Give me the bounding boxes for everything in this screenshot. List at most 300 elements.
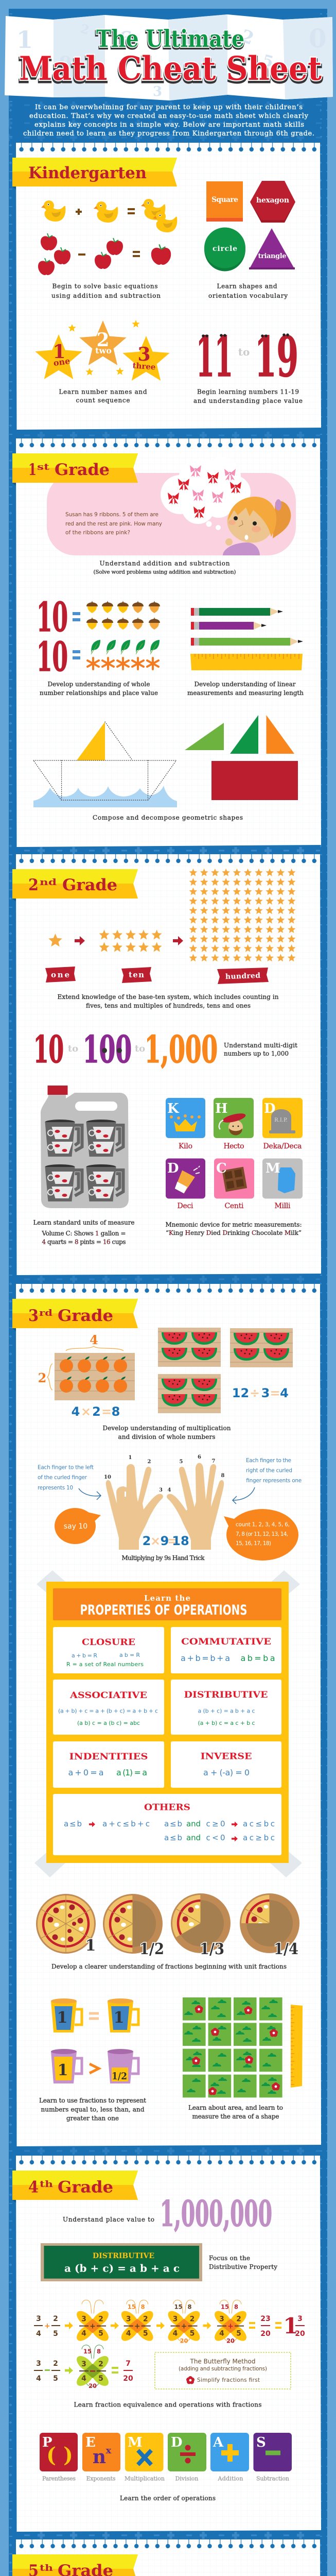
others: a ≤ b <box>64 1819 82 1828</box>
ribbon heading: 1st grade <box>12 453 138 486</box>
right note: finger represents one <box>246 1478 302 1484</box>
finger numbers: 4 <box>168 1487 171 1493</box>
caption: addition and subtraction: Understand addition and subtraction <box>100 560 230 567</box>
ribbon heading: 5th grade <box>12 2554 138 2576</box>
caption: base ten: fives, tens and multiples of hundreds, tens and ones <box>86 1002 251 1009</box>
shape: triangle: triangle <box>258 252 286 260</box>
ribbon heading: kindergarten: Kindergarten <box>28 164 147 182</box>
finger numbers: 1 <box>129 1455 132 1461</box>
distributive: DISTRIBUTIVE <box>184 1690 268 1700</box>
caption: number names: count sequence <box>76 397 130 404</box>
distributive: (a + b) c = a c + b c <box>198 1720 255 1726</box>
butterfly method addition: 5 <box>53 2330 58 2338</box>
tile: parentheses: P <box>42 2435 52 2450</box>
mug fractions <box>51 1998 138 2083</box>
butterfly method note: (adding and subtracting fractions) <box>179 2366 267 2372</box>
inverse <box>171 1741 281 1788</box>
ribbon heading: 3rd grade <box>12 1299 138 1331</box>
caption: geometric shapes: Compose and decompose geometric shapes <box>93 814 243 821</box>
closure: CLOSURE <box>82 1637 135 1648</box>
caption: equations: using addition and subtraction <box>51 292 161 299</box>
ribbon heading: 3rd grade: 3 <box>28 1307 39 1325</box>
background numbers: 6 <box>118 27 133 52</box>
ribbon heading: 1st grade: 1 <box>28 461 37 479</box>
butterfly method subtraction: 2 <box>53 2360 58 2368</box>
butterfly method subtraction: 4 <box>36 2375 41 2383</box>
caption: 11-19 <box>193 388 303 404</box>
identities: INDENTITIES <box>69 1752 148 1762</box>
counting stars: 1 <box>52 341 66 363</box>
shape: triangle <box>249 228 295 269</box>
caption: area: Learn about area, and learn to <box>188 2104 283 2111</box>
commutative: COMMUTATIVE <box>181 1637 271 1647</box>
tile: deka <box>262 1098 303 1150</box>
butterfly step 4: 8 <box>234 2303 238 2311</box>
orange crate multiplication: × <box>81 1404 91 1419</box>
butterfly method note: Simplify fractions first <box>197 2377 260 2383</box>
pizza fractions: 1/3 <box>200 1940 224 1958</box>
butterfly step 3: 2 <box>190 2315 194 2324</box>
tile: deka: Deka/Deca <box>263 1142 302 1150</box>
equation 2 x 9 = 18: × <box>150 1534 161 1548</box>
finger numbers: 5 <box>180 1459 183 1465</box>
bubble: say 10 <box>55 1508 101 1544</box>
mug fractions: 1 <box>57 2009 67 2027</box>
others: a c ≤ b c <box>243 1819 275 1828</box>
ribbon heading: 1st grade: Grade <box>55 461 110 479</box>
chalkboard: distributive <box>41 2243 202 2281</box>
shape: square: Square <box>211 196 238 204</box>
others: OTHERS <box>144 1803 190 1813</box>
place value to a million: Understand place value to <box>63 2216 154 2223</box>
word problem text <box>65 512 162 536</box>
tile: hecto: H <box>215 1101 228 1116</box>
finger numbers: 3 <box>159 1487 163 1493</box>
thought bubble <box>161 457 251 530</box>
shape: hexagon <box>250 181 295 223</box>
counting stars: one <box>53 356 70 368</box>
ribbons <box>168 465 241 518</box>
closure: a + b = R <box>72 1652 97 1659</box>
caption: place value <box>40 681 158 697</box>
card header: Learn the <box>144 1594 190 1603</box>
intro text <box>23 104 314 138</box>
butterfly method addition: 2 <box>53 2315 58 2323</box>
caption: standard units: Volume C: Shows 1 gallon = <box>41 1230 126 1237</box>
tile: addition <box>210 2433 249 2482</box>
butterfly method note: The Butterfly Method <box>189 2358 255 2365</box>
right note: right of the curled <box>246 1468 292 1474</box>
left note: Each finger to the left <box>38 1465 94 1471</box>
butterfly method subtraction: 15 <box>83 2348 92 2355</box>
counting stars: three <box>132 361 156 372</box>
panel: 1st grade <box>12 438 321 847</box>
shape: circle <box>204 228 245 271</box>
butterfly step 1: 4 <box>81 2330 86 2338</box>
result: 20 <box>260 2330 271 2338</box>
arrow right <box>233 1487 255 1504</box>
tile: subtraction: S <box>256 2435 266 2450</box>
butterfly method note <box>155 2352 291 2389</box>
numbers 10 to 100 to 1000 <box>33 1027 218 1071</box>
finger numbers: 7 <box>212 1459 216 1464</box>
orange crate multiplication: 2 <box>92 1404 101 1419</box>
intro text: education. That’s why we created an easy-to-use math sheet which clearly <box>29 112 309 120</box>
bubble: say 10: say 10 <box>64 1522 87 1531</box>
ribbon heading: 5th grade: th <box>40 2563 53 2573</box>
tile: exponents: n <box>93 2446 106 2468</box>
mug fractions: 1 <box>58 2061 68 2079</box>
pizza fractions: 1/2 <box>139 1940 164 1958</box>
butterfly method addition: 4 <box>36 2330 41 2338</box>
tile: kilo <box>166 1098 205 1150</box>
commutative: a b = b a <box>241 1653 275 1663</box>
bubble: count: 15, 16, 17, 18) <box>236 1540 271 1547</box>
intro text: children need to learn as they progress from Kindergarten through 6th grade. <box>23 130 314 138</box>
numbers 10 to 100 to 1000: 1,000 <box>145 1027 218 1071</box>
numbers 11 to 19: 19 <box>255 325 298 389</box>
ten equals acorns <box>37 594 160 641</box>
orange crate multiplication: 2 <box>38 1370 46 1385</box>
butterfly step 4 <box>212 2300 249 2345</box>
pizza fractions: 1 <box>85 1937 96 1955</box>
word problem text: of the ribbons are pink? <box>65 530 130 536</box>
base ten stars <box>48 868 297 963</box>
caption: mnemonic: “King Henry Died Drinking Chocolate Milk” <box>166 1229 302 1236</box>
right note <box>246 1458 302 1484</box>
others: a ≤ b <box>164 1833 182 1842</box>
associative <box>53 1680 164 1735</box>
tile: subtraction <box>253 2433 292 2482</box>
chalkboard: distributive: a (b + c) = a b + a c <box>64 2262 180 2275</box>
caption: equations <box>51 282 161 299</box>
tile: parentheses <box>40 2433 78 2482</box>
inverse: a + (-a) = 0 <box>203 1768 250 1777</box>
result: 3 <box>297 2315 303 2323</box>
label: one <box>45 967 76 982</box>
caption: fractions: Develop a clearer understanding of fractions beginning with unit fractions <box>51 1963 287 1970</box>
background numbers: 2 <box>79 21 91 38</box>
distributive <box>171 1680 281 1735</box>
orange crate multiplication: 4 <box>72 1404 80 1419</box>
caption: area <box>188 2104 283 2120</box>
counting stars: 3 <box>137 344 151 365</box>
butterfly step 3 <box>165 2300 203 2345</box>
tile: multiplication: M <box>128 2435 143 2450</box>
butterfly step 3: 5 <box>190 2330 194 2338</box>
caption: place value: Develop understanding of whole <box>47 681 150 688</box>
label: hundred <box>217 968 269 984</box>
tile: centi: C <box>216 1161 227 1176</box>
caption: number names: Learn number names and <box>59 388 147 396</box>
tile: division: Division <box>175 2475 199 2482</box>
boat made of shapes <box>33 722 177 807</box>
numbers 11 to 19: to <box>238 346 250 358</box>
shape: square <box>206 181 243 222</box>
tile: kilo: K <box>167 1101 180 1116</box>
butterfly step 1: 2 <box>98 2315 103 2324</box>
background numbers: 2 <box>238 26 257 49</box>
others: a ≤ b <box>164 1819 182 1828</box>
separated shapes <box>185 715 298 800</box>
butterfly step 4: 20 <box>226 2337 235 2345</box>
butterfly step 3: 20 <box>180 2337 188 2345</box>
addition with ducks <box>41 199 177 232</box>
caption: measurement <box>187 681 304 697</box>
right note: Each finger to the <box>246 1458 291 1464</box>
background numbers: 5 <box>260 52 275 72</box>
caption: multiplication and division: Develop understanding of multiplication <box>103 1425 231 1432</box>
caption: addition and subtraction: (Solve word problems using addition and subtraction) <box>94 569 236 575</box>
left note: represents 10 <box>38 1485 73 1491</box>
ten equals leaves and flowers <box>37 634 160 681</box>
heading: the ultimate: The Ultimate <box>96 26 244 54</box>
caption: hand trick: Multiplying by 9s Hand Trick <box>121 1554 205 1562</box>
background numbers: 3 <box>153 84 162 99</box>
finger numbers: 10 <box>104 1475 111 1480</box>
caption: fractions and one: Learn to use fractions to represent <box>39 2097 146 2104</box>
tile: exponents: E <box>85 2435 96 2450</box>
shape: hexagon: hexagon <box>256 196 289 205</box>
butterfly step 2: 8 <box>141 2303 145 2311</box>
numbers 10 to 100 to 1000: to <box>68 1043 78 1054</box>
identities <box>53 1741 164 1788</box>
caption: measurement: Develop understanding of linear <box>194 681 296 688</box>
tile: deka: R.I.P. <box>274 1117 288 1123</box>
ten equals acorns: 10 <box>37 594 68 641</box>
others: a + c ≤ b + c <box>102 1819 150 1828</box>
others: c < 0 <box>206 1833 225 1842</box>
butterfly step 2: 15 <box>128 2303 136 2311</box>
caption: addition and subtraction <box>94 560 236 575</box>
identities: a (1) = a <box>116 1768 147 1777</box>
ribbon heading: 2nd grade: Grade <box>62 876 117 894</box>
caption: distributive property: Focus on the <box>209 2255 250 2262</box>
tile: deka: D <box>264 1101 276 1116</box>
caption: order of operations: Learn the order of operations <box>120 2495 216 2502</box>
butterfly method subtraction: 8 <box>97 2348 101 2355</box>
orange crate multiplication <box>38 1332 135 1419</box>
tile: deci <box>166 1158 205 1210</box>
ribbon heading: kindergarten <box>12 158 177 190</box>
caption: shapes: Learn shapes and <box>217 282 277 290</box>
background numbers: 4 <box>185 27 201 53</box>
watermelon crates division: 3 <box>261 1386 270 1400</box>
bubble: count: count 1, 2, 3, 4, 5, 6, <box>236 1522 290 1528</box>
left hand <box>106 1464 163 1550</box>
intro text: It can be overwhelming for any parent to keep up with their children’s <box>35 104 303 111</box>
area grid <box>183 1997 303 2097</box>
panel: 4th grade <box>12 2156 321 2532</box>
properties of operations card <box>34 1570 302 1877</box>
watermelon crates division: 12 <box>232 1386 249 1400</box>
butterfly method addition: + <box>44 2322 50 2330</box>
ribbon heading: 4th grade: Grade <box>58 2178 113 2197</box>
bubble: count: 7, 8 (or 11, 12, 13, 14, <box>236 1531 288 1537</box>
caption: standard units: 4 quarts = 8 pints = 16 cups <box>42 1239 126 1246</box>
equation 2 x 9 = 18: 18 <box>172 1534 189 1548</box>
tile: addition: Addition <box>217 2475 243 2482</box>
others: and <box>186 1833 201 1842</box>
left note: of the curled finger <box>38 1475 87 1481</box>
butterfly method addition <box>34 2300 305 2345</box>
butterfly step 1: 5 <box>98 2330 103 2338</box>
butterfly method addition: 3 <box>36 2315 41 2323</box>
tile: subtraction: Subtraction <box>256 2475 289 2482</box>
butterfly step 2: 5 <box>143 2330 148 2338</box>
counting stars <box>35 320 170 381</box>
numbers 10 to 100 to 1000: 10 <box>33 1027 64 1071</box>
caption: area: measure the area of a shape <box>192 2113 279 2120</box>
counting stars: two <box>95 346 112 355</box>
word problem illustration <box>47 457 296 555</box>
tile: kilo: Kilo <box>179 1142 192 1150</box>
caption: mnemonic: Mnemonic device for metric measurements: <box>166 1221 302 1228</box>
ribbon heading: 2nd grade <box>12 869 138 902</box>
closure: a b = R <box>119 1652 140 1658</box>
label: hundred: hundred <box>225 972 260 981</box>
associative: ASSOCIATIVE <box>69 1690 147 1701</box>
result: 20 <box>295 2330 305 2338</box>
butterfly step 3: 8 <box>187 2303 192 2311</box>
background numbers: 1 <box>16 26 33 54</box>
caption: 11-19: Begin learning numbers 11-19 <box>197 388 299 396</box>
ribbon heading: 4th grade <box>12 2171 138 2203</box>
panel: 5th grade <box>12 2539 321 2576</box>
pemdas tiles <box>40 2433 292 2482</box>
watermelon crates division <box>158 1328 293 1413</box>
tile: deci: Deci <box>177 1202 193 1210</box>
caption: equations: Begin to solve basic equations <box>52 282 157 290</box>
others: a c ≥ b c <box>243 1833 275 1842</box>
caption: distributive property <box>209 2255 277 2270</box>
9s hand trick <box>38 1454 302 1562</box>
caption: base ten <box>58 993 279 1009</box>
gallon jug with cups <box>41 1086 129 1208</box>
butterfly step 4: 5 <box>236 2330 241 2338</box>
background numbers: 0 <box>309 23 327 54</box>
ribbon heading: 3rd grade: Grade <box>58 1307 113 1325</box>
caption: 11-19: and understanding place value <box>193 397 303 404</box>
ribbon heading: 1st grade: st <box>37 462 49 472</box>
result <box>249 2313 305 2338</box>
caption: number names <box>59 388 147 404</box>
caption: multi-digit: numbers up to 1,000 <box>224 1050 289 1057</box>
background numbers: 9 <box>59 53 72 74</box>
watermelon crates division: 4 <box>280 1386 289 1400</box>
ribbon heading: 3rd grade: rd <box>39 1308 52 1318</box>
tile: addition: A <box>213 2435 224 2450</box>
numbers 10 to 100 to 1000: to <box>135 1043 145 1054</box>
label: ten: ten <box>129 970 144 979</box>
butterfly method subtraction: 5 <box>53 2375 58 2383</box>
caption: base ten: Extend knowledge of the base-ten system, which includes counting in <box>58 993 279 1001</box>
butterfly step 1 <box>74 2300 111 2344</box>
butterfly step 2: + <box>134 2323 140 2331</box>
distributive: a (b + c) = a b + a c <box>198 1707 255 1715</box>
others: c ≥ 0 <box>206 1819 225 1828</box>
caption: distributive property: Distributive Property <box>209 2263 277 2270</box>
caption: standard units <box>33 1219 135 1246</box>
right hand <box>167 1463 224 1550</box>
butterfly method subtraction: 5 <box>98 2375 103 2383</box>
caption: mnemonic <box>166 1221 302 1236</box>
butterfly step 1: + <box>90 2323 96 2331</box>
place value to a million <box>63 2194 272 2235</box>
pizza fractions: 1/4 <box>274 1940 298 1958</box>
tile: milli: Milli <box>275 1202 291 1210</box>
equation 2 x 9 = 18: 2 <box>143 1534 151 1548</box>
panel: 2nd grade <box>12 854 321 1275</box>
commutative <box>171 1627 281 1673</box>
orange crate multiplication: 4 <box>90 1332 98 1347</box>
subtraction with apples <box>38 233 171 275</box>
tile: parentheses: Parentheses <box>42 2475 76 2482</box>
commutative: a + b = b + a <box>181 1653 230 1663</box>
pizza fractions <box>36 1893 299 1958</box>
tile: parentheses: ( ) <box>46 2443 73 2467</box>
butterfly step 3: 3 <box>173 2315 178 2324</box>
butterfly step 4: 3 <box>219 2315 224 2324</box>
numbers 10 to 100 to 1000: 100 <box>83 1027 132 1071</box>
orange crate multiplication: 8 <box>112 1404 120 1419</box>
tile: division <box>168 2433 206 2482</box>
finger numbers <box>104 1454 225 1493</box>
ribbon heading: 4th grade: th <box>40 2179 53 2190</box>
caption: fraction equivalence: Learn fraction equivalence and operations with fractions <box>74 2401 261 2408</box>
panel: kindergarten <box>12 143 321 430</box>
butterfly step 3: + <box>181 2323 187 2331</box>
tile: multiplication: Multiplication <box>125 2475 165 2482</box>
butterfly method subtraction: 2 <box>98 2360 103 2368</box>
closure <box>53 1627 164 1673</box>
butterfly step 4: + <box>227 2323 234 2331</box>
caption: place value: number relationships and place value <box>40 689 158 697</box>
intro text: explains key concepts in a simple way. Below are important math skills <box>34 121 304 129</box>
ribbon heading: 2nd grade: nd <box>40 877 57 888</box>
associative: (a b) c = a (b c) = abc <box>77 1720 140 1726</box>
tile: division: D <box>171 2435 183 2450</box>
butterfly method subtraction: 7 <box>126 2360 131 2368</box>
word problem text: red and the rest are pink. How many <box>65 521 162 527</box>
watermelon crates division: = <box>270 1386 280 1400</box>
identities: a + 0 = a <box>68 1768 104 1777</box>
background numbers <box>16 21 327 99</box>
caption: shapes: orientation vocabulary <box>208 292 288 299</box>
butterfly method subtraction: 20 <box>89 2382 97 2389</box>
result: 1 <box>283 2313 298 2338</box>
butterfly step 3: 4 <box>173 2330 178 2338</box>
butterfly step 2: 2 <box>143 2315 148 2324</box>
butterfly step 2: 4 <box>126 2330 131 2338</box>
caption: fractions and one: numbers equal to, less than, and <box>41 2106 145 2113</box>
card header <box>53 1588 281 1620</box>
butterfly method subtraction: 3 <box>36 2360 41 2368</box>
butterfly method subtraction: 3 <box>81 2360 86 2368</box>
numbers 11 to 19: 11 <box>196 325 233 389</box>
counting stars: 2 <box>96 329 110 351</box>
caption: multi-digit <box>224 1042 297 1057</box>
orange crate multiplication: = <box>101 1404 112 1419</box>
metric mnemonic tiles <box>166 1098 303 1210</box>
tile: hecto <box>214 1098 254 1150</box>
ten equals leaves and flowers: 10 <box>37 634 68 681</box>
tile: exponents: x <box>106 2445 112 2456</box>
tile: centi <box>214 1158 254 1210</box>
tile: milli <box>262 1158 303 1210</box>
tile: centi: Centi <box>224 1202 244 1210</box>
butterfly step 3: 15 <box>174 2303 183 2311</box>
